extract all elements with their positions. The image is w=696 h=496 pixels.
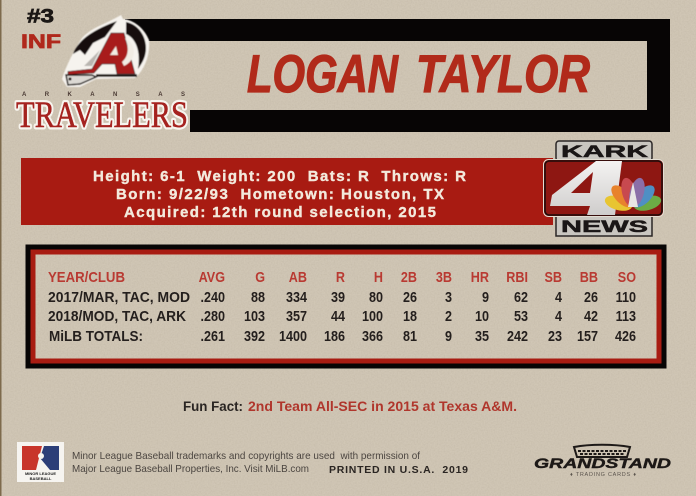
row: 2018: 2 — [445, 307, 452, 324]
row: 2018: 4 — [555, 307, 562, 324]
fun fact: 2nd Team All-SEC in 2015 at Texas A&M. — [248, 398, 517, 414]
team name halo: TRAVELERS — [16, 95, 188, 136]
row: career totals: .261 — [200, 327, 225, 344]
table header: BB — [580, 268, 598, 285]
row: 2018: 42 — [584, 307, 598, 324]
icon: Minor League Baseball logo: BASEBALL — [30, 476, 52, 481]
legal text: Minor League Baseball trademarks and copyrights are used with permission of — [72, 450, 420, 462]
row: 2017: 4 — [555, 288, 562, 305]
row: 2017: 9 — [482, 288, 489, 305]
player name — [247, 45, 590, 104]
row: 2018: 18 — [403, 307, 417, 324]
print notice: PRINTED IN U.S.A. 2019 — [329, 464, 468, 476]
row: 2018: 357 — [286, 307, 307, 324]
row: career totals: 426 — [615, 327, 636, 344]
table header: G — [255, 268, 265, 285]
row: 2017: 3 — [445, 288, 452, 305]
row: 2017: .240 — [200, 288, 225, 305]
KARK label: KARK — [561, 142, 649, 161]
table header: SB — [545, 268, 562, 285]
player name: LOGAN — [247, 45, 399, 104]
table header: 3B — [436, 268, 452, 285]
row: career totals: 23 — [548, 327, 562, 344]
state name: ARKANSAS — [22, 92, 185, 98]
row: career totals: 35 — [475, 327, 489, 344]
row: 2017: 26 — [584, 288, 598, 305]
row: career totals: 9 — [445, 327, 452, 344]
NBC peacock — [603, 176, 663, 214]
row: career totals: 81 — [403, 327, 417, 344]
NEWS label: NEWS — [561, 217, 648, 236]
legal text — [72, 450, 420, 475]
row: 2018: 10 — [475, 307, 489, 324]
row: 2017: 26 — [403, 288, 417, 305]
panel: statistics table — [28, 247, 664, 366]
row: career totals: 242 — [507, 327, 528, 344]
row: 2017: 2017/MAR, TAC, MOD — [48, 289, 190, 306]
brand name: GRANDSTAND — [534, 455, 671, 471]
row: career totals: 392 — [244, 327, 265, 344]
bio line: acquired: Acquired: 12th round selection, 2015 — [124, 204, 436, 221]
row: career totals: 186 — [324, 327, 345, 344]
table header: YEAR/CLUB — [48, 269, 125, 286]
row: 2017: 334 — [286, 288, 307, 305]
row: 2018: 100 — [362, 307, 383, 324]
row: career totals: 157 — [577, 327, 598, 344]
table header: R — [336, 268, 345, 285]
panel: player bio — [21, 158, 553, 225]
team logo: Arkansas Travelers — [16, 15, 188, 136]
row: 2017: 88 — [251, 288, 265, 305]
icon: Minor League Baseball logo: MINOR LEAGUE — [25, 471, 56, 476]
table header — [48, 268, 636, 286]
table header: AVG — [199, 268, 225, 285]
row: career totals: 1400 — [279, 327, 307, 344]
row: 2018 — [48, 307, 636, 325]
sponsor logo: KARK 4 News — [544, 141, 664, 236]
table header: AB — [289, 268, 307, 285]
row: 2018: 2018/MOD, TAC, ARK — [48, 308, 186, 325]
table header: SO — [618, 268, 636, 285]
table header: HR — [471, 268, 489, 285]
fun fact: Fun Fact: — [183, 398, 243, 414]
icon: stadium — [574, 445, 630, 457]
row: career totals: MiLB TOTALS: — [49, 328, 143, 345]
row: 2018: 113 — [616, 307, 636, 324]
table header: H — [374, 268, 383, 285]
row: 2017: 62 — [514, 288, 528, 305]
numeral 4 — [550, 161, 622, 215]
table header: RBI — [506, 268, 528, 285]
icon: Minor League Baseball logo — [17, 442, 64, 482]
row: 2018: 53 — [514, 307, 528, 324]
row: 2017 — [48, 288, 636, 306]
row: 2018: 44 — [331, 307, 345, 324]
icon: horse head with letter A — [62, 15, 149, 87]
row: career totals — [49, 327, 636, 345]
jersey number: #3 — [27, 6, 54, 28]
row: 2017: 110 — [616, 288, 636, 305]
row: 2017: 39 — [331, 288, 345, 305]
row: 2018: 103 — [244, 307, 265, 324]
table header: 2B — [401, 268, 417, 285]
legal text: Major League Baseball Properties, Inc. Visit MiLB.com — [72, 463, 309, 475]
team name: TRAVELERS — [16, 95, 188, 136]
red logo plate — [544, 160, 664, 216]
row: 2018: .280 — [200, 307, 225, 324]
position: INF — [21, 32, 61, 53]
row: career totals: 366 — [362, 327, 383, 344]
bio line: physical details: Height: 6-1 Weight: 200 Bats: R Throws: R — [93, 168, 466, 185]
player name: TAYLOR — [416, 45, 590, 104]
Grandstand logo — [534, 445, 671, 478]
name frame — [125, 19, 670, 132]
row: 2017: 80 — [369, 288, 383, 305]
brand tagline: ♦ TRADING CARDS ♦ — [570, 472, 636, 478]
bio line: birth and hometown: Born: 9/22/93 Hometown: Houston, TX — [116, 186, 444, 203]
